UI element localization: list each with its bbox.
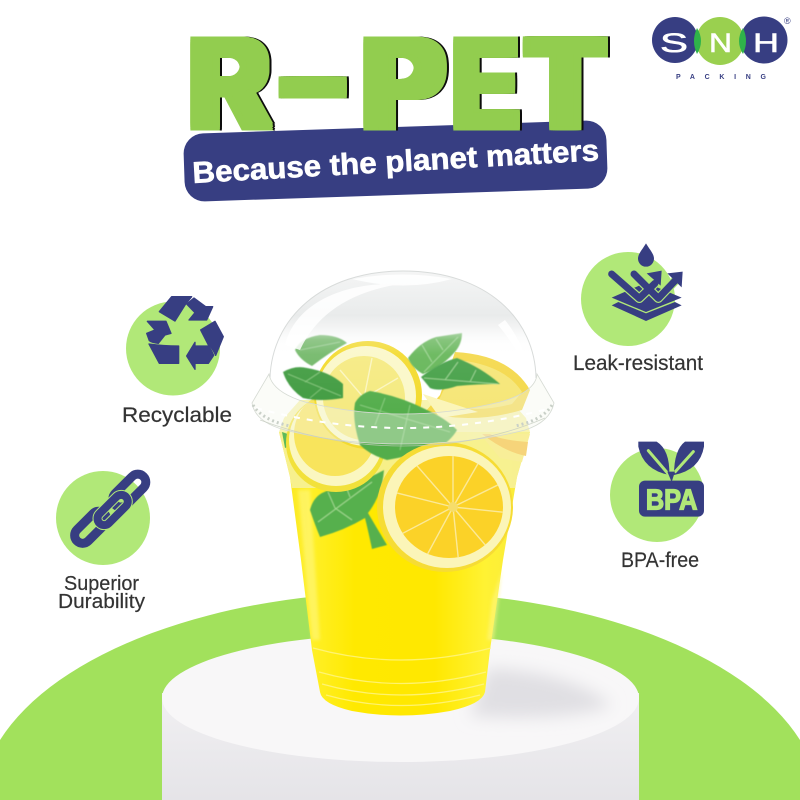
dome lid bbox=[270, 271, 536, 420]
cup with lemonade bbox=[252, 271, 554, 716]
mint leaf: upper right bbox=[408, 333, 462, 374]
lid rim ticks bbox=[256, 408, 551, 428]
mint leaf: center bbox=[354, 391, 457, 460]
banner text: Because the planet matters bbox=[192, 134, 600, 190]
logo: SNH Packing: S bbox=[660, 28, 688, 58]
icon: chain links bbox=[71, 471, 149, 547]
icon circle: Superior Durability bbox=[56, 471, 150, 565]
label: Recyclable: Recyclable bbox=[122, 404, 232, 427]
logo: SNH Packing bbox=[652, 16, 791, 81]
big lemon slice bbox=[377, 440, 520, 575]
icon: BPA leaves: BPA bbox=[646, 484, 697, 516]
cup base rings bbox=[313, 648, 491, 706]
logo: SNH Packing: ® bbox=[784, 16, 791, 26]
mint leaf: left small bbox=[282, 432, 305, 448]
label: Superior Durability: Superior bbox=[64, 573, 139, 595]
title: R-PET: R bbox=[190, 13, 268, 154]
icon circle: Recyclable bbox=[126, 297, 223, 396]
label: Superior Durability: Durability bbox=[58, 591, 145, 613]
lemon slice: right in dome bbox=[423, 352, 530, 418]
green background arc bbox=[0, 592, 800, 800]
label: BPA-free: BPA-free bbox=[621, 549, 699, 572]
label: Superior Durability bbox=[58, 573, 145, 613]
lemon slice: lower left bbox=[286, 392, 386, 492]
label: Leak-resistant: Leak-resistant bbox=[573, 352, 703, 375]
banner: Because the planet matters bbox=[183, 120, 608, 202]
title: R-PET bbox=[190, 6, 610, 154]
liquid highlights bbox=[298, 490, 502, 640]
logo: SNH Packing: H bbox=[753, 28, 779, 58]
dome highlights bbox=[285, 274, 528, 372]
pedestal bbox=[162, 634, 639, 800]
title: R-PET: T bbox=[529, 13, 602, 154]
lemon slice: top centre bbox=[314, 341, 422, 449]
icon circle: BPA-free bbox=[610, 442, 704, 542]
liquid bbox=[279, 432, 530, 716]
pedestal cup shadow bbox=[470, 668, 612, 718]
mint leaf: left bbox=[283, 367, 343, 400]
title: R-PET: - bbox=[283, 6, 343, 147]
mint leaf: top left bbox=[295, 335, 347, 366]
pale upper liquid bbox=[279, 400, 530, 488]
logo: SNH Packing: PACKING bbox=[676, 74, 767, 81]
icon: leak resistant layers bbox=[612, 243, 683, 321]
title: R-PET: P bbox=[363, 13, 443, 154]
lid rim bbox=[252, 374, 554, 444]
mint leaf: right bbox=[421, 358, 500, 390]
icon circle: Leak-resistant bbox=[581, 243, 683, 346]
logo: SNH Packing: N bbox=[709, 28, 732, 58]
title: R-PET: E bbox=[453, 13, 517, 154]
icon: recycle bbox=[147, 297, 223, 369]
lemon slice: right behind bbox=[480, 434, 530, 462]
dome outline bbox=[270, 271, 536, 378]
mint leaf: lower bbox=[310, 470, 387, 549]
